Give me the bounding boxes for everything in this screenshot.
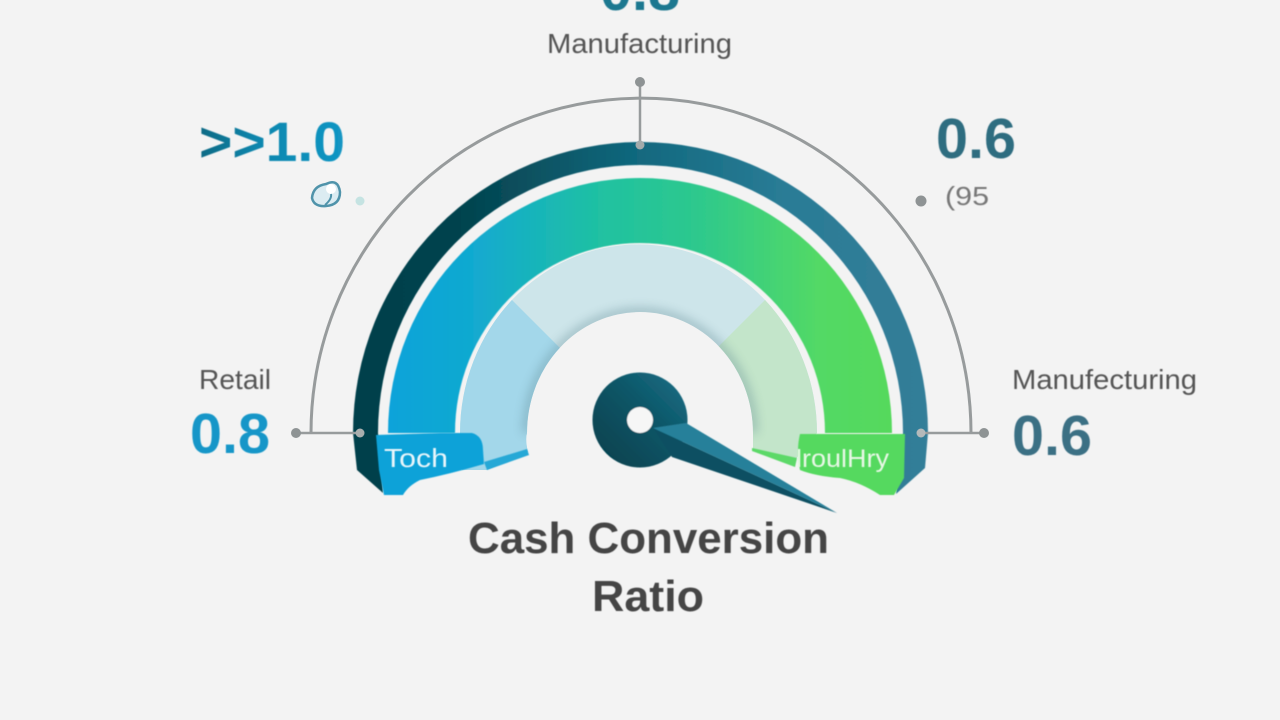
label: top value and Manufacturing: Manufacturing [547,28,732,59]
inner edge shadow [527,312,753,433]
title: Ratio [592,572,704,621]
pale right segment [718,300,817,458]
tag: Tech [376,433,484,495]
label: right Manufacturing value: 0.6 [1012,404,1092,468]
label: Retail value: Retail [199,364,271,395]
green strip under pale band [752,448,797,467]
pale left segment [460,300,560,470]
label: upper right value [936,107,1016,211]
label: right Manufacturing value: Manufecturing [1012,364,1197,395]
tag: Healthy: lroulHry [796,445,890,473]
label: top value and Manufacturing [547,0,732,59]
tag: Healthy [796,434,905,495]
outer dark gauge band [353,142,928,494]
label: Retail value: 0.8 [190,402,270,466]
blue strip under pale band [484,449,529,470]
tag: Tech: Toch [384,443,448,473]
gauge infographic [191,0,1196,612]
main gradient gauge band [388,178,892,433]
label: upper right value: 0.6 [936,107,1016,171]
label: upper left value: >>1.0 [199,110,345,173]
connector dots [291,77,989,438]
thin grey outer arc [311,98,971,433]
label: Retail value [190,364,271,466]
label: upper left value [199,110,345,206]
label: upper right value: (95 [945,181,989,211]
icon: upper left glyph [312,182,340,206]
connector lines [296,82,984,433]
title: Cash Conversion [468,514,829,563]
label: right Manufacturing value [1012,364,1197,468]
pale inner gauge band [460,244,817,470]
title [468,514,829,621]
dial hub and needle [592,372,837,513]
